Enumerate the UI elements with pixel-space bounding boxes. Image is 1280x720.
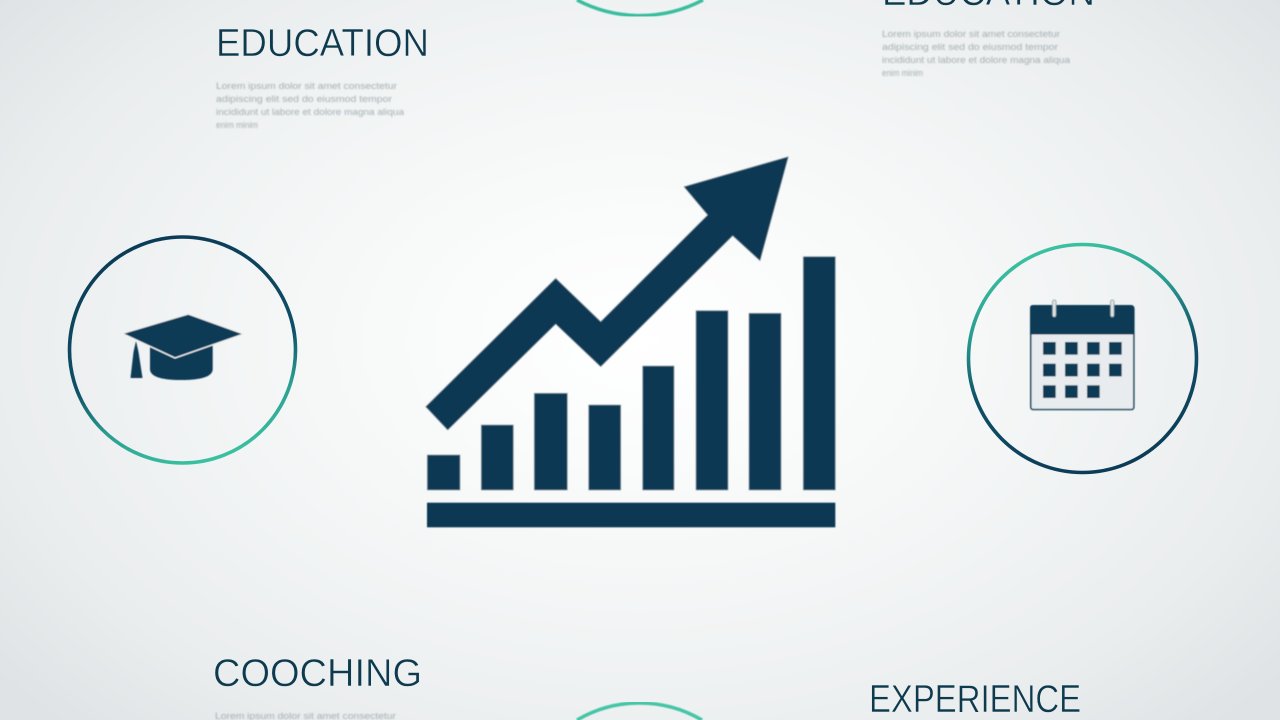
heading: experience: EXPERIENCE — [869, 678, 1081, 720]
text block: education description: Lorem ipsum dolor sit amet consectetur — [216, 81, 397, 91]
arrow: rising zigzag — [426, 157, 788, 430]
chart: central growth bars with rising arrow — [426, 157, 835, 527]
chart baseline — [427, 503, 835, 527]
text block: education description: enim minim — [216, 120, 258, 130]
ring: right circle — [968, 244, 1196, 472]
heading: education: EDUCATION — [216, 22, 429, 65]
bar chart: eight bars — [427, 257, 835, 490]
heading: cooching: COOCHING — [213, 652, 422, 695]
block: education top left — [216, 22, 429, 130]
text block: education cropped description: enim minim — [882, 68, 923, 78]
ring: bottom partial circle — [577, 703, 702, 720]
text block: education cropped description — [882, 29, 1070, 78]
icon: graduation cap in ring — [70, 237, 296, 463]
text block: education cropped description: adipiscing elit sed do eiusmod tempor — [882, 42, 1058, 52]
text block: education description: incididunt ut labore et dolore magna aliqua — [216, 107, 404, 117]
icon: calendar — [1030, 300, 1134, 410]
icon: graduation cap — [122, 314, 244, 380]
ring: top partial circle — [577, 0, 703, 16]
block: cooching — [213, 652, 422, 720]
text block: education cropped description: incididunt ut labore et dolore magna aliqua — [882, 55, 1070, 65]
ring: left circle — [70, 237, 296, 463]
text block: education description: adipiscing elit sed do eiusmod tempor — [216, 94, 392, 104]
icon: calendar in ring — [968, 244, 1196, 472]
text block: education description — [216, 81, 404, 130]
text block: education cropped description: Lorem ipsum dolor sit amet consectetur — [882, 29, 1060, 39]
block: education top right — [882, 0, 1095, 78]
